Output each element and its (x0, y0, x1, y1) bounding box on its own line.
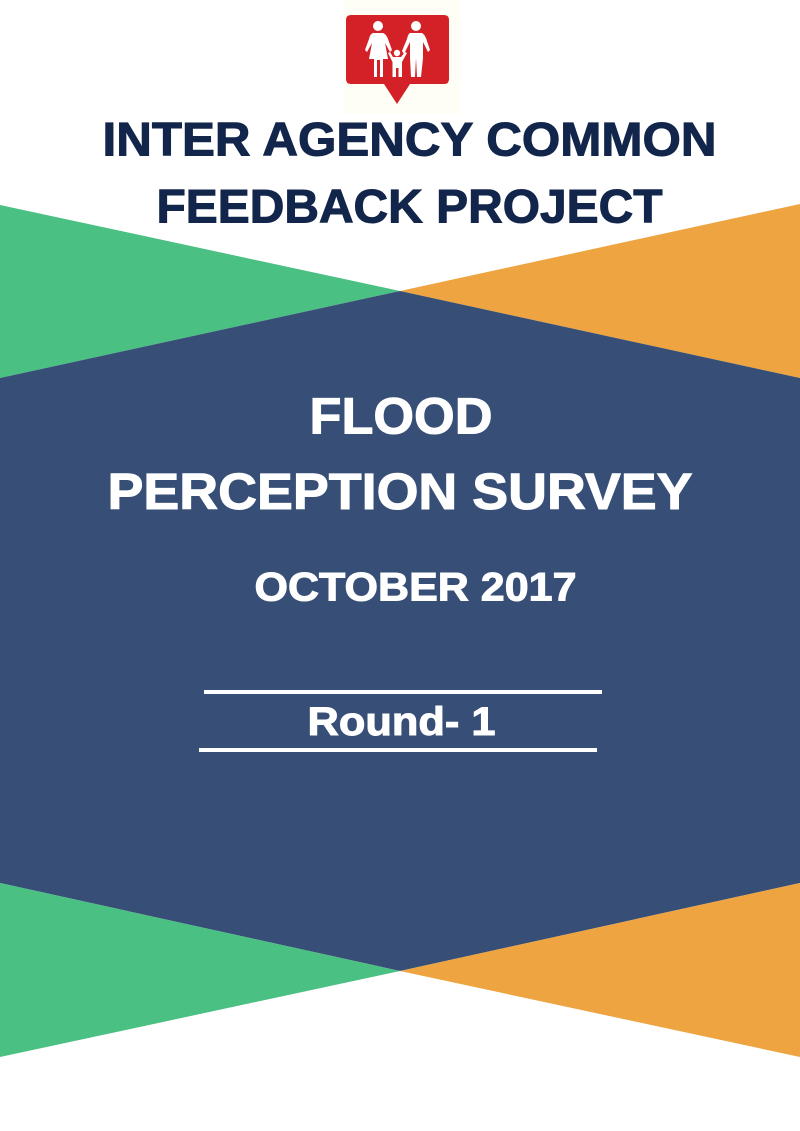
round label with rules: Round- 1 (308, 700, 496, 744)
survey heading: FLOOD (310, 388, 492, 444)
top right orange triangle (400, 204, 800, 378)
survey heading (108, 388, 693, 520)
title (102, 112, 716, 232)
icon: family speech-bubble logo (344, 0, 460, 114)
top left green triangle (0, 205, 400, 378)
round label with rules (199, 690, 602, 752)
bottom left green triangle (0, 883, 400, 1057)
date: OCTOBER 2017 (254, 566, 576, 610)
title: FEEDBACK PROJECT (156, 180, 663, 232)
survey heading: PERCEPTION SURVEY (108, 463, 693, 520)
title: INTER AGENCY COMMON (102, 112, 716, 166)
bottom right orange triangle (400, 883, 800, 1057)
navy hexagon panel (0, 291, 800, 971)
